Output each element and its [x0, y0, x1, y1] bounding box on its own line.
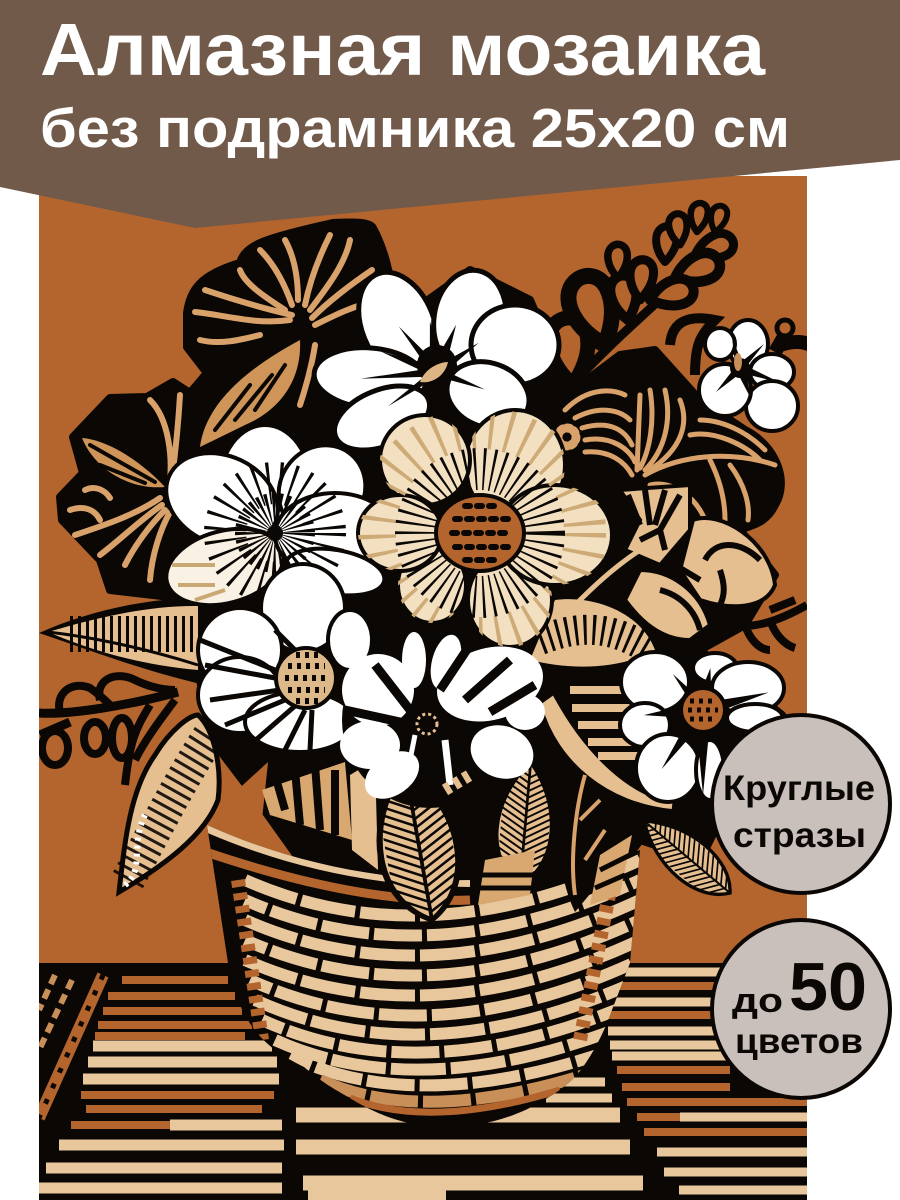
left leaf [39, 598, 205, 685]
badge: up to 50 colours: до [732, 982, 783, 1020]
badge: up to 50 colours: цветов [735, 1022, 863, 1061]
badge: round rhinestones: стразы [733, 816, 866, 855]
white flower small top right [699, 320, 798, 431]
leaf lower right [646, 823, 732, 896]
white flower left [164, 427, 382, 606]
leaves over the pot rim [376, 766, 632, 922]
tan flowers right [570, 485, 775, 640]
black bouquet silhouette [60, 223, 782, 925]
title banner [0, 0, 900, 228]
striped table [39, 963, 807, 1200]
artwork: flowers in a woven pot [39, 176, 810, 1200]
lower left leaf [119, 715, 219, 892]
badge: up to 50 colours [712, 920, 890, 1098]
white flower top [312, 268, 562, 448]
badge: round rhinestones [712, 715, 890, 893]
badge: round rhinestones: Круглые [723, 769, 875, 808]
sprig right [725, 600, 807, 650]
woven pot [200, 822, 640, 1127]
title line 1: Алмазная мозаика [40, 8, 766, 91]
brown wedge and stems above the pot rim [232, 760, 378, 870]
white flower lower right [620, 652, 784, 802]
dark flower right [558, 390, 775, 520]
dark flower top left [195, 235, 380, 447]
cream flower centre [358, 410, 612, 647]
title line 2: без подрамника 25х20 см [40, 97, 790, 159]
white flower lower left [198, 564, 372, 752]
badge: up to 50 colours: 50 [789, 949, 867, 1025]
sprig left [39, 676, 178, 785]
sprig top right [550, 200, 807, 380]
white and black flower lower middle [340, 631, 551, 809]
dark flower left [70, 395, 180, 580]
orange artwork background [39, 176, 807, 963]
striped leaves and crescent, right centre [530, 599, 672, 806]
